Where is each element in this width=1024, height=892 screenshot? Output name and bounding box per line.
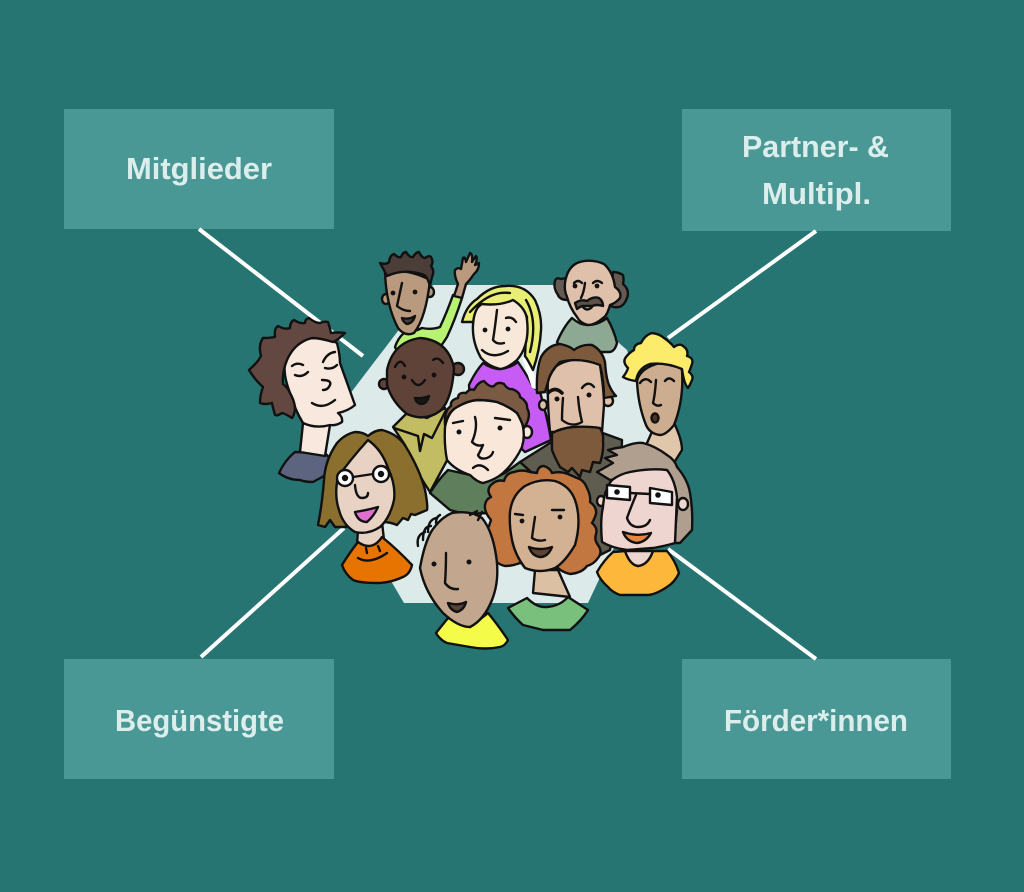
box: Partner- & Multipl.: Multipl. — [762, 176, 871, 211]
box: Partner- & Multipl.: Partner- & — [742, 129, 889, 164]
person: bald man with moustache — [554, 261, 628, 352]
connector: Förder*innen — [668, 549, 816, 659]
box: Begünstigte: Begünstigte — [115, 703, 284, 738]
box: Förder*innen: Förder*innen — [724, 703, 908, 738]
person: raised hand — [380, 252, 479, 358]
box: Mitglieder: Mitglieder — [126, 151, 272, 186]
hexagon background — [311, 285, 662, 603]
box: Partner- & Multipl. — [682, 109, 951, 231]
connector: Partner — [668, 231, 816, 338]
connector: Mitglieder — [199, 229, 363, 356]
person: blonde woman — [462, 286, 551, 452]
person: yellow shirt, sparse hair — [418, 511, 508, 648]
person: red curly hair — [485, 466, 600, 630]
box: Mitglieder — [64, 109, 334, 229]
connector: Begünstigte — [201, 528, 344, 657]
person: yellow curly hair — [623, 333, 693, 466]
person: long hair with beard — [520, 344, 622, 560]
person: woman with round glasses — [318, 430, 427, 583]
box: Förder*innen — [682, 659, 951, 779]
person: grey hair, rectangular glasses — [597, 443, 692, 595]
person: short hair, green shirt — [430, 381, 532, 514]
box: Begünstigte — [64, 659, 334, 779]
people group — [249, 252, 693, 648]
person: dark skinned man — [379, 338, 464, 492]
person: curly hair profile — [249, 318, 355, 482]
